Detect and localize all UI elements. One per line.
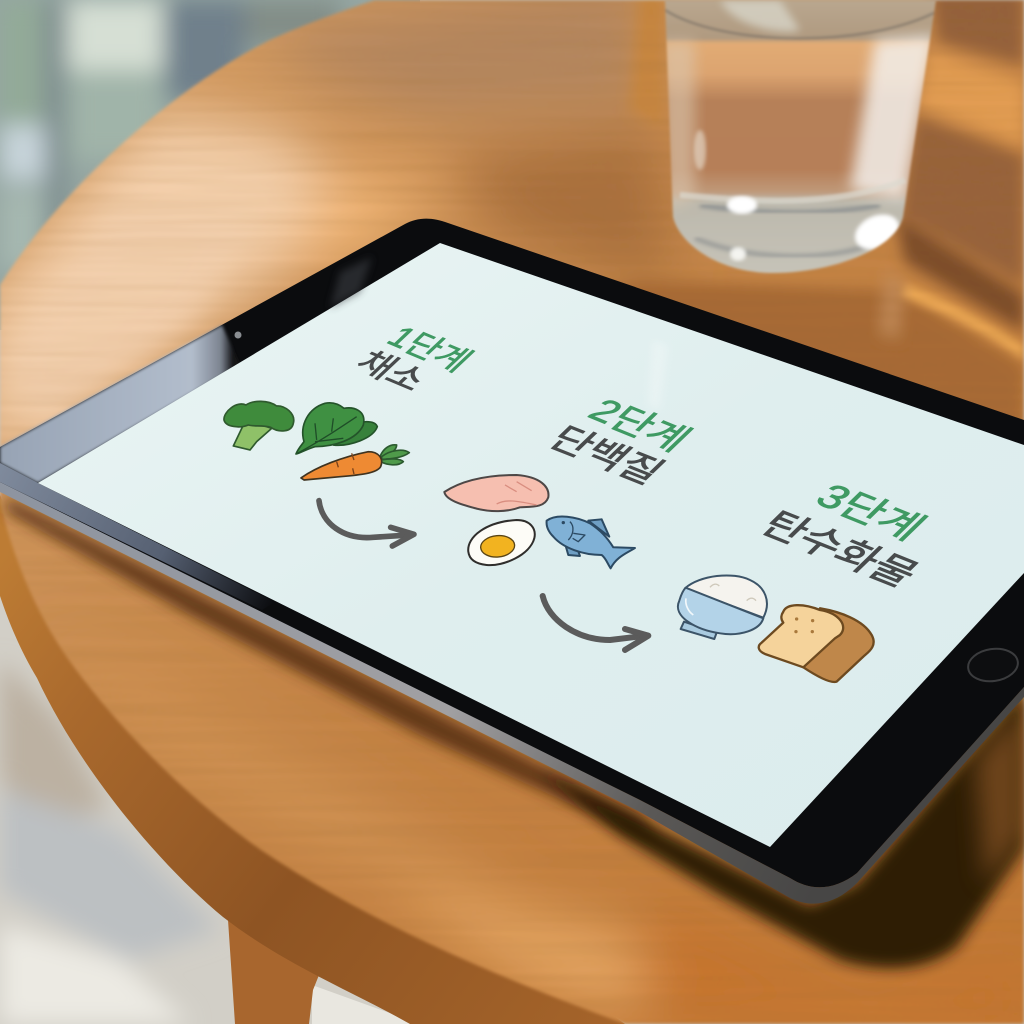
tablet screen <box>38 243 1024 847</box>
table side edge <box>0 495 625 1024</box>
step 3 heading: 3단계 <box>807 477 934 547</box>
step 3 label: carbohydrate <box>752 477 934 593</box>
table lighting <box>0 0 802 1021</box>
wood grain <box>3 82 968 430</box>
step 1 heading: 1단계 <box>379 321 480 378</box>
camera <box>234 332 242 338</box>
icon: rice bowl <box>678 575 767 639</box>
glass highlights <box>850 35 936 200</box>
screen glare <box>648 340 668 410</box>
water glass <box>660 0 945 275</box>
tablet <box>0 219 1024 904</box>
icon: chicken breast <box>444 475 548 511</box>
top bezel glare <box>330 257 372 308</box>
step 1 name: 채소 <box>347 346 435 397</box>
icon: broccoli <box>224 401 294 450</box>
arrow: step 2 to step 3 <box>543 596 648 650</box>
step 2 label: protein <box>540 393 698 491</box>
bezel reflection left <box>0 325 240 483</box>
step 2 name: 단백질 <box>540 421 672 491</box>
tablet side edge <box>0 480 1024 904</box>
icon: spinach <box>296 403 377 454</box>
icon: boiled egg <box>468 520 535 565</box>
icon: bread <box>759 605 874 682</box>
step 3 name: 탄수화물 <box>752 505 927 593</box>
tablet bezel <box>0 219 1024 887</box>
icon: carrot <box>301 445 409 480</box>
bezel reflection bottom <box>0 463 275 610</box>
table leg <box>227 905 325 1024</box>
icon: fish <box>547 516 635 568</box>
light streak <box>900 284 1024 360</box>
shadows under tablet <box>5 497 1024 968</box>
arrow: step 1 to step 2 <box>319 501 414 546</box>
step 1 label: vegetables <box>347 321 480 397</box>
home button <box>966 646 1020 684</box>
step 2 heading: 2단계 <box>580 393 698 458</box>
glass body <box>660 0 945 275</box>
pale sunlit patch <box>39 302 196 421</box>
